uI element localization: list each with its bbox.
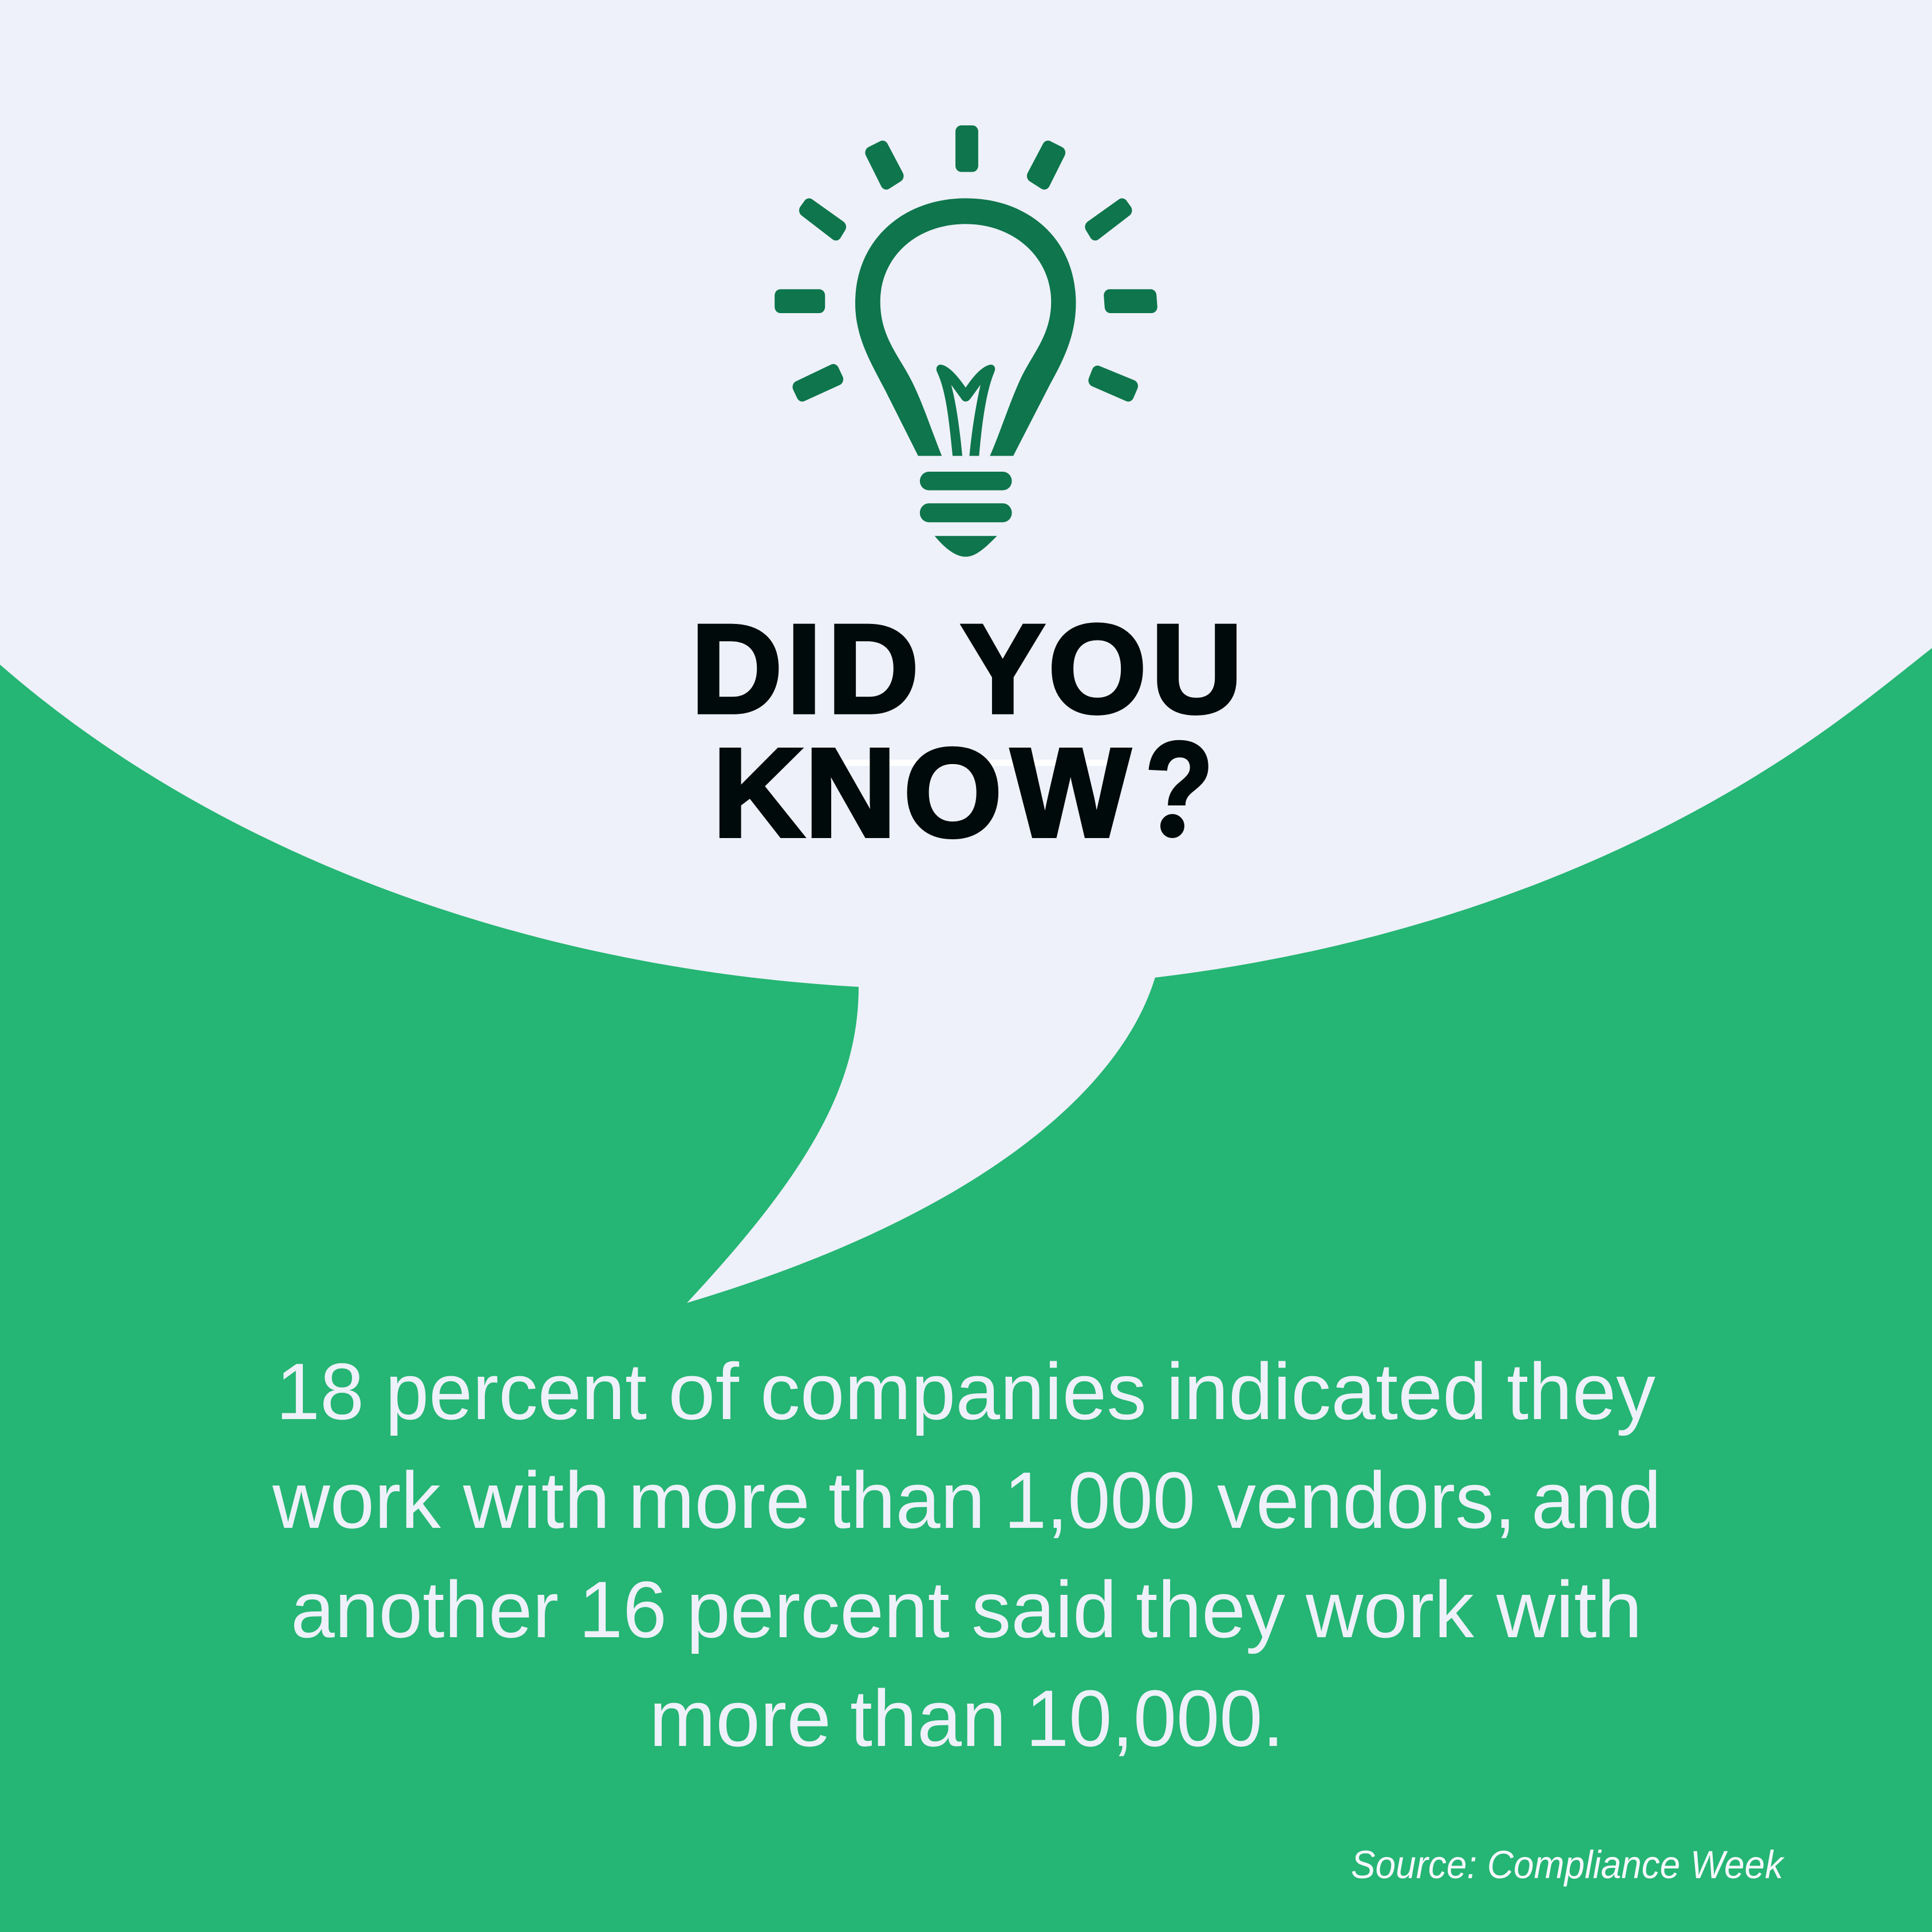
body line 4: more <box>649 1673 831 1763</box>
body line 2: and <box>1531 1455 1661 1545</box>
heading question mark dot <box>1161 815 1183 837</box>
icon: bulb glass outline <box>855 198 1076 456</box>
speech bubble <box>0 0 1932 1303</box>
body line 2: than <box>828 1455 985 1545</box>
body line 3: said <box>971 1564 1117 1654</box>
body line 1: percent <box>385 1346 647 1436</box>
icon: filament <box>937 365 995 456</box>
body line 1: companies <box>760 1346 1147 1436</box>
body line 4: than <box>850 1673 1006 1763</box>
body line 3: percent <box>686 1564 950 1654</box>
heading line 2: KNOW <box>713 722 1131 863</box>
body line 2: vendors, <box>1217 1455 1516 1545</box>
body line 2: with <box>463 1455 610 1545</box>
icon: light rays <box>780 132 1152 396</box>
white highlight band behind heading <box>844 760 1112 766</box>
body line 2: 1,000 <box>1004 1455 1195 1545</box>
body line 3: another <box>291 1564 559 1654</box>
body line 2: more <box>628 1455 810 1545</box>
body line 1: 18 <box>276 1346 364 1436</box>
body text <box>272 1346 1661 1763</box>
heading question mark: ? <box>1145 716 1213 858</box>
body line 3: 16 <box>579 1564 667 1654</box>
body line 3: they <box>1136 1564 1285 1654</box>
body line 1: of <box>668 1346 740 1436</box>
body line 2: work <box>272 1455 441 1545</box>
icon: bulb base <box>920 472 1012 557</box>
source credit: Source: Compliance Week <box>1351 1843 1785 1887</box>
body line 4: 10,000. <box>1026 1673 1284 1763</box>
body line 1: indicated <box>1166 1346 1487 1436</box>
body line 3: work <box>1305 1564 1475 1654</box>
body line 1: they <box>1507 1346 1656 1436</box>
heading line 1: DID YOU <box>691 598 1243 740</box>
heading: did you know <box>697 622 1236 839</box>
body line 3: with <box>1496 1564 1642 1654</box>
icon: light bulb <box>780 132 1152 557</box>
